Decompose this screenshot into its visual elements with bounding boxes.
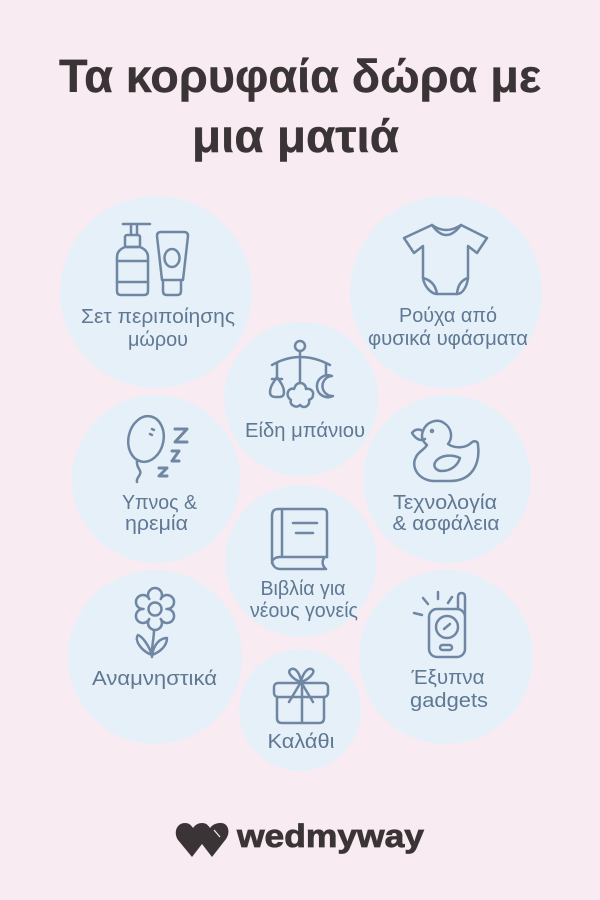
label: keepsakes: Αναμνηστικά (92, 668, 217, 690)
panel: sleep and calm (72, 395, 240, 563)
label: sleep and calm: ηρεμία (125, 513, 188, 535)
panel: basket (239, 649, 361, 771)
label: sleep and calm: Υπνος & (122, 492, 198, 514)
title (59, 50, 541, 162)
icon: baby onesie (404, 225, 487, 294)
logo (176, 818, 424, 857)
icon: sleeping balloon (124, 413, 187, 482)
icon: rubber duck (412, 421, 478, 481)
icon: flower (136, 588, 174, 657)
icon: double heart mark (176, 823, 228, 857)
icon: gift box (274, 669, 328, 723)
panel: tech and safety (363, 395, 531, 563)
label: tech and safety: & ασφάλεια (392, 513, 500, 535)
label: bath items: Είδη μπάνιου (245, 420, 365, 442)
icon: baby monitor (414, 592, 465, 657)
icon: baby crib mobile (270, 341, 333, 407)
label: natural fabric clothes: Ρούχα από (399, 305, 497, 327)
panel: books for new parents (225, 485, 377, 637)
label: smart gadgets: gadgets (410, 690, 488, 712)
panel: baby care set (60, 196, 252, 388)
title: μια ματιά (192, 110, 399, 162)
panel: natural fabric clothes (350, 196, 542, 388)
panel: keepsakes (68, 570, 242, 744)
label: baby care set: Σετ περιποίησης (81, 306, 235, 328)
icon: pump bottle and tube (117, 224, 188, 295)
label: books for new parents: νέους γονείς (250, 600, 358, 622)
wordmark: wedmyway (236, 818, 424, 854)
label: basket: Καλάθι (268, 731, 334, 753)
label: smart gadgets: Έξυπνα (410, 667, 484, 689)
icon: book (272, 509, 327, 569)
label: natural fabric clothes: φυσικά υφάσματα (368, 328, 528, 350)
panel: bath items (224, 322, 378, 476)
label: baby care set: μώρου (128, 329, 188, 351)
label: books for new parents: Βιβλία για (260, 578, 346, 600)
panel: smart gadgets (359, 570, 533, 744)
title: Τα κορυφαία δώρα με (59, 50, 541, 102)
label: tech and safety: Τεχνολογία (393, 492, 497, 514)
